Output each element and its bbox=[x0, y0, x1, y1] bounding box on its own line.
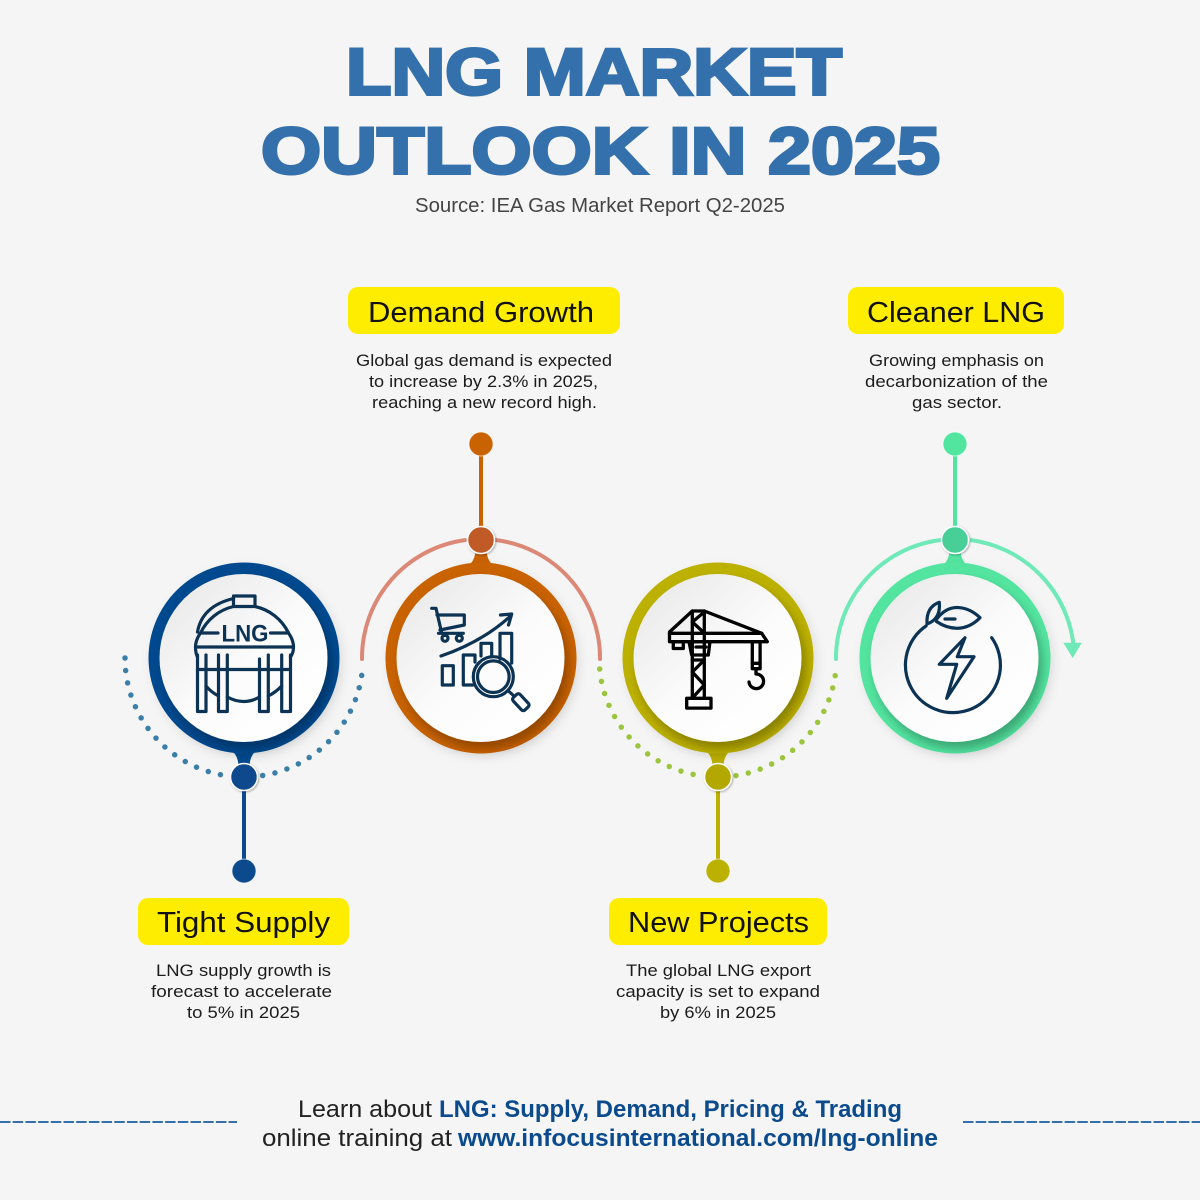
text: cleaner LNG description: decarbonization of the bbox=[865, 372, 1048, 391]
ring: cleaner LNG bbox=[860, 526, 1050, 754]
text: tight supply description bbox=[151, 961, 332, 1022]
text: cleaner LNG description bbox=[865, 351, 1048, 412]
node: new projects bbox=[704, 764, 732, 790]
text: new projects description: The global LNG export bbox=[626, 961, 811, 980]
icon: clean energy bbox=[905, 602, 1000, 713]
text: demand growth description: Global gas demand is expected bbox=[356, 351, 612, 370]
text: demand growth description: to increase by 2.3% in 2025, bbox=[369, 372, 598, 391]
node: demand growth bbox=[468, 526, 494, 554]
heading pill: cleaner LNG bbox=[848, 287, 1064, 334]
text: tight supply description: to 5% in 2025 bbox=[187, 1003, 300, 1022]
icon: construction crane bbox=[670, 611, 767, 708]
ring: new projects bbox=[622, 562, 814, 790]
title: OUTLOOK IN 2025 bbox=[261, 114, 940, 188]
heading pill: new projects bbox=[609, 898, 827, 945]
arc: cleaner LNG arrow arc bbox=[836, 540, 1082, 659]
heading pill: demand growth bbox=[348, 287, 620, 334]
icon: LNG storage tank bbox=[196, 596, 294, 712]
panel: new projects label bbox=[609, 898, 827, 1022]
title bbox=[261, 34, 940, 188]
source line: Source: IEA Gas Market Report Q2-2025 bbox=[415, 195, 785, 217]
node: cleaner LNG bbox=[942, 526, 968, 554]
text: new projects description: capacity is set to expand bbox=[616, 982, 820, 1001]
title: LNG MARKET bbox=[346, 34, 842, 108]
text: tight supply description: LNG supply growth is bbox=[156, 961, 331, 980]
text: new projects description: by 6% in 2025 bbox=[660, 1003, 776, 1022]
text: tight supply description: forecast to accelerate bbox=[151, 982, 332, 1001]
footer call to action: LNG: Supply, Demand, Pricing & Trading bbox=[439, 1096, 902, 1123]
panel: demand growth label bbox=[348, 287, 620, 412]
footer call to action: www.infocusinternational.com/lng-online bbox=[457, 1125, 938, 1152]
text: demand growth description bbox=[356, 351, 612, 412]
node: tight supply bbox=[230, 764, 258, 790]
text: demand growth description: reaching a new record high. bbox=[372, 393, 597, 412]
footer call to action: online training at bbox=[262, 1125, 452, 1152]
heading pill: tight supply: Tight Supply bbox=[157, 907, 331, 939]
arc: new projects dotted arc bbox=[600, 669, 836, 776]
ring: tight supply bbox=[148, 562, 340, 790]
connector: demand growth bbox=[459, 432, 503, 570]
heading pill: tight supply bbox=[138, 898, 349, 945]
text: cleaner LNG description: Growing emphasis on bbox=[869, 351, 1044, 370]
panel: tight supply label bbox=[138, 898, 349, 1022]
ring: demand growth bbox=[386, 526, 576, 754]
icon: market analysis chart bbox=[432, 608, 530, 712]
heading pill: demand growth: Demand Growth bbox=[368, 297, 594, 329]
connector: cleaner LNG bbox=[933, 432, 977, 570]
footer call to action: Learn about bbox=[298, 1096, 432, 1123]
text: new projects description bbox=[616, 961, 820, 1022]
connector: tight supply bbox=[222, 746, 266, 883]
panel: cleaner LNG label bbox=[848, 287, 1064, 412]
arc: tight supply dotted arc bbox=[125, 658, 362, 776]
text: cleaner LNG description: gas sector. bbox=[912, 393, 1002, 412]
heading pill: new projects: New Projects bbox=[628, 907, 809, 939]
footer call to action bbox=[262, 1096, 938, 1152]
icon: LNG storage tank: LNG bbox=[222, 621, 268, 648]
arc: demand growth solid arc bbox=[362, 540, 600, 659]
connector: new projects bbox=[696, 746, 740, 883]
heading pill: cleaner LNG: Cleaner LNG bbox=[867, 297, 1045, 329]
